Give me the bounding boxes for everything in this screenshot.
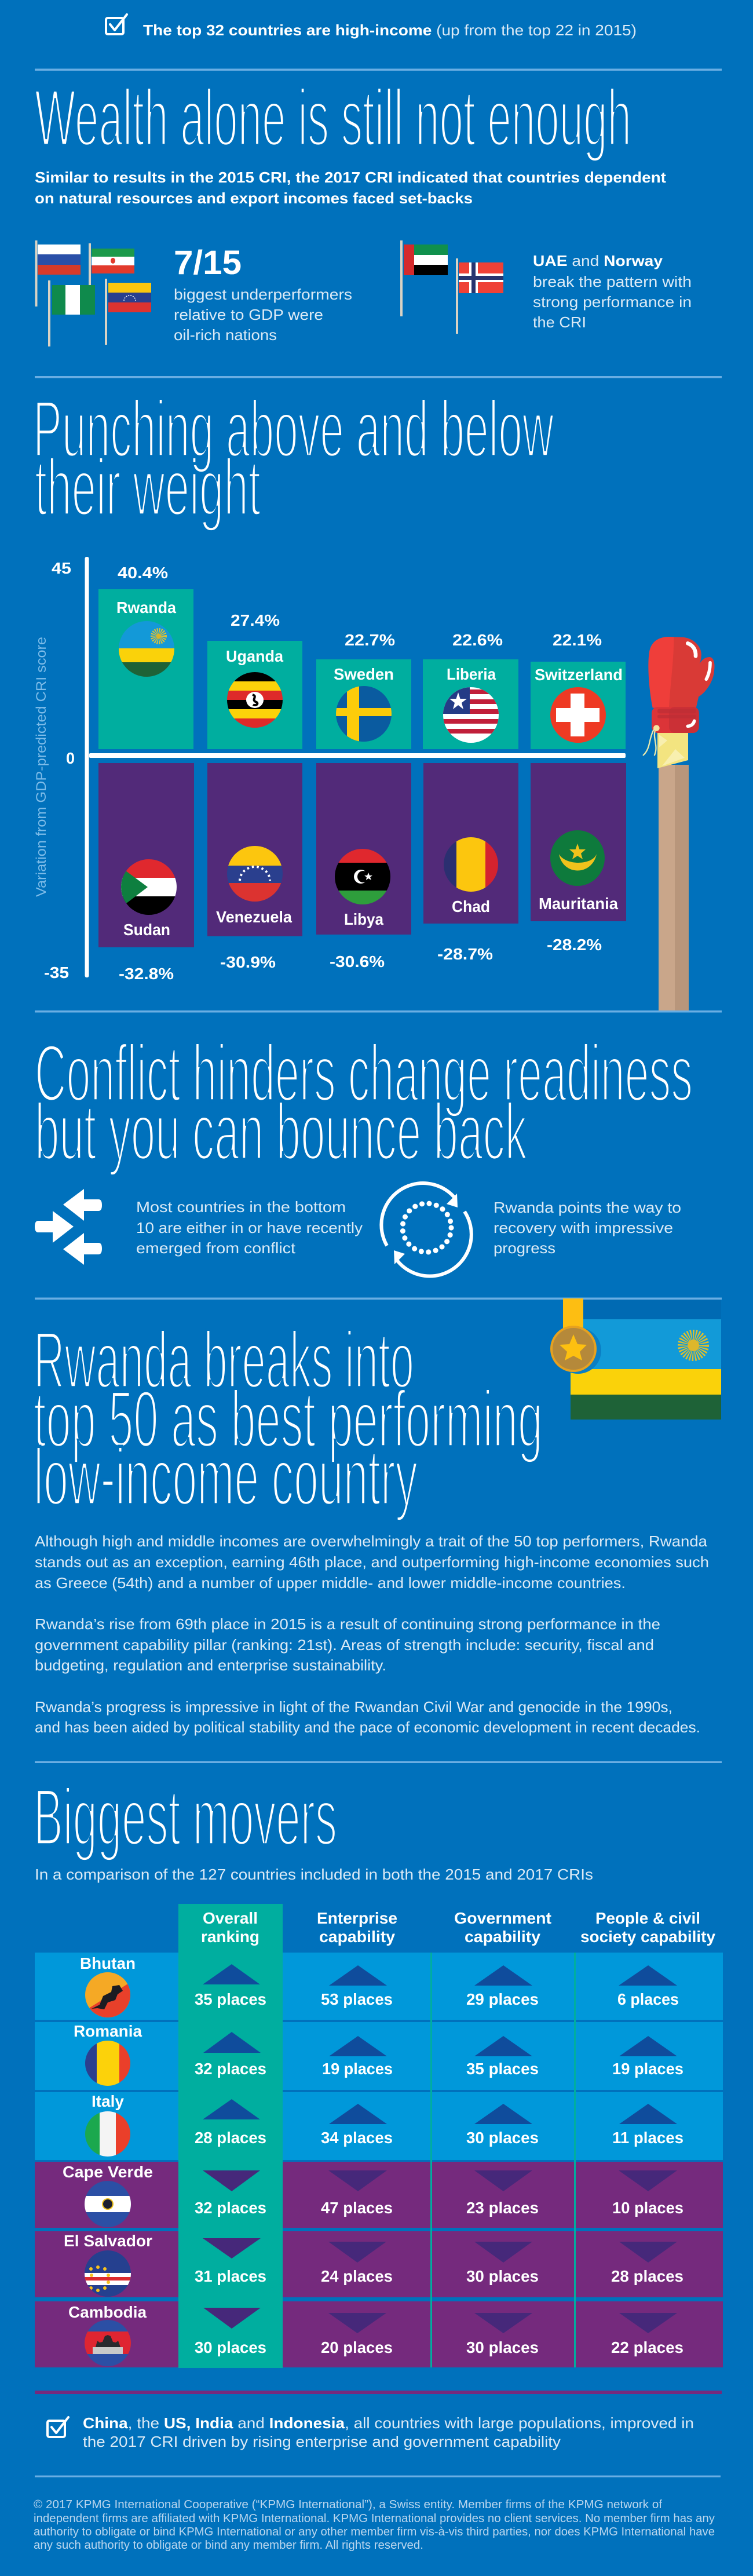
text block: Rwanda paragraphs: Rwanda’s progress is impressive in light of the Rwandan Civil War and genocide in the 1990s, (35, 1698, 672, 1716)
row: El Salvador: 31 places (195, 2267, 266, 2285)
bar: Liberia: 22.6% (452, 631, 503, 649)
text block: wealth intro: on natural resources and export incomes faced set-backs (35, 189, 473, 207)
stat: 7/15: oil-rich nations (174, 326, 277, 344)
text block: Rwanda paragraphs: Although high and middle incomes are overwhelmingly a trait of the 50 top performers, Rwanda (35, 1533, 708, 1550)
heading: Rwanda breaks into top 50 (34, 1315, 543, 1522)
row: Romania: 19 places (612, 2060, 683, 2078)
row: Cambodia: 30 places (466, 2338, 539, 2356)
text block: Rwanda recovery: recovery with impressive (494, 1219, 673, 1236)
row: Italy: 11 places (612, 2129, 683, 2147)
bar: Venezuela (207, 763, 302, 971)
text block: bottom 10 conflict: 10 are either in or have recently (136, 1219, 363, 1236)
text block: bottom 10 conflict: Most countries in the bottom (136, 1198, 346, 1216)
text block: copyright footer: authority to obligate or bind KPMG International or any other member firm vis-à-vis third parties, nor does KPMG International have (34, 2526, 715, 2538)
bar: Uganda (207, 611, 302, 749)
text block: UAE and Norway: UAE and Norway (533, 252, 663, 269)
heading: conflict hinders change readiness (35, 1028, 693, 1177)
heading: Rwanda breaks into top 50: low-income country (34, 1432, 418, 1522)
text block: wealth intro: Similar to results in the 2015 CRI, the 2017 CRI indicated that countries dependent (35, 169, 666, 186)
row: Cape Verde: 32 places (195, 2199, 266, 2217)
row: Cambodia: 30 places (195, 2338, 266, 2356)
bar: Chad: Chad (452, 897, 490, 915)
row: Romania: 35 places (466, 2060, 539, 2078)
heading: punching above and below (33, 384, 554, 532)
icon: Russia flag (35, 240, 81, 307)
row: Cape Verde: Cape Verde (63, 2163, 153, 2181)
column headers: capability (465, 1928, 540, 1946)
bar: Switzerland (531, 631, 626, 749)
bar: Venezuela: -30.9% (220, 953, 276, 971)
text block: comparison note: In a comparison of the 127 countries included in both the 2015 and 2017 CRIs (35, 1866, 593, 1883)
icon: flags of UAE and Norway (400, 240, 503, 334)
row: Romania (74, 2022, 683, 2087)
bar: Switzerland: 22.1% (553, 631, 602, 649)
text block: Rwanda recovery: progress (494, 1239, 555, 1257)
text block: Rwanda paragraphs: government capability pillar (ranking: 21st). Areas of strength include: security, fiscal and (35, 1636, 654, 1654)
bar: Libya: -30.6% (330, 953, 385, 970)
row: El Salvador: 30 places (466, 2267, 539, 2285)
chart axis (34, 557, 626, 981)
icon: Rwanda flag with medal (551, 1298, 721, 1420)
row: Bhutan: 53 places (321, 1990, 393, 2008)
row: Italy: 34 places (321, 2129, 393, 2147)
glove (644, 637, 714, 755)
row: Cambodia: Cambodia (68, 2303, 147, 2321)
text block: UAE and Norway: strong performance in (533, 293, 692, 311)
row: El Salvador: 28 places (611, 2267, 683, 2285)
icon: Iran flag (89, 243, 134, 285)
column headers: ranking (201, 1928, 259, 1946)
row: Bhutan: 6 places (617, 1990, 679, 2008)
bar: Mauritania (531, 763, 626, 954)
icon: opposing arrows (35, 1189, 102, 1265)
bar: Mauritania: Mauritania (539, 895, 618, 913)
row: Cambodia: 22 places (611, 2338, 683, 2356)
row: El Salvador: 24 places (321, 2267, 393, 2285)
text block: copyright footer: any such authority to obligate or bind any member firm. All rights reserved. (34, 2539, 423, 2552)
bar: Sweden: 22.7% (345, 631, 395, 649)
callout: large populations: the 2017 CRI driven by rising enterprise and government capability (83, 2433, 561, 2450)
row: El Salvador: El Salvador (64, 2232, 152, 2250)
chart axis: Variation from GDP-predicted CRI score (34, 637, 49, 897)
text block: bottom 10 conflict: emerged from conflict (136, 1239, 296, 1257)
row: Romania: 19 places (322, 2060, 393, 2078)
text block: UAE and Norway (533, 252, 692, 331)
text block: copyright footer: © 2017 KPMG International Cooperative (“KPMG International”), a Swiss entity. Member firms of the KPMG network of (34, 2498, 662, 2511)
stat: 7/15: relative to GDP were (174, 306, 323, 323)
row: Cape Verde: 47 places (321, 2199, 393, 2217)
column headers: society capability (580, 1928, 715, 1946)
row: Italy: 30 places (466, 2129, 539, 2147)
icon: flags of oil-rich nations (35, 240, 151, 346)
bar: Chad (423, 763, 518, 963)
bar: Sweden: Sweden (334, 665, 394, 683)
bar: Mauritania: -28.2% (547, 936, 602, 954)
stat: 7/15: biggest underperformers (174, 286, 352, 303)
row: Italy: Italy (92, 2092, 124, 2110)
row: Bhutan: 35 places (195, 1990, 266, 2008)
text block: copyright footer: independent firms are affiliated with KPMG International. KPMG International provides no client services. No member firm has any (34, 2512, 715, 2525)
stat: 7/15: 7/15 (174, 244, 242, 282)
row backgrounds (35, 1904, 723, 2368)
callout: large populations (47, 2414, 694, 2450)
column headers: capability (319, 1928, 395, 1946)
bar: Venezuela: Venezuela (216, 908, 292, 926)
text block: Rwanda recovery: Rwanda points the way to (494, 1199, 681, 1216)
text block: Rwanda paragraphs (35, 1533, 709, 1736)
text block: UAE and Norway: break the pattern with (533, 273, 692, 290)
bar: Rwanda (98, 564, 193, 749)
callout: large populations: China, the US, India and Indonesia , all countries with large populations, improved in (83, 2414, 694, 2432)
stat: 7/15 (174, 244, 352, 344)
icon: checkbox (106, 14, 127, 34)
column headers: Enterprise (317, 1909, 397, 1927)
icon: boxing glove on stick (644, 637, 714, 1011)
icon: UAE flag (400, 240, 448, 316)
chart axis: 0 (66, 749, 75, 767)
text block: Rwanda paragraphs: stands out as an exception, earning 46th place, and outperforming high-income economies such (35, 1553, 709, 1571)
icon: Norway flag (456, 258, 503, 334)
bar: Libya (316, 763, 411, 970)
text block: copyright footer (34, 2498, 715, 2552)
row: Italy: 28 places (195, 2129, 266, 2147)
row: Bhutan (80, 1954, 679, 2019)
text block: wealth intro (35, 169, 666, 207)
text block: Rwanda paragraphs: Rwanda’s rise from 69th place in 2015 is a result of continuing strong performance in the (35, 1615, 660, 1633)
bar: Sudan: -32.8% (119, 965, 174, 983)
row: Cape Verde: 10 places (612, 2199, 683, 2217)
row: El Salvador (64, 2232, 683, 2297)
text block: Rwanda paragraphs: budgeting, regulation and enterprise sustainability. (35, 1656, 386, 1674)
bar: Rwanda: 40.4% (118, 564, 168, 582)
icon: checkbox (47, 2417, 68, 2437)
heading: biggest movers: Biggest movers (34, 1772, 337, 1862)
row: Cape Verde (63, 2163, 683, 2227)
callout: top 32 countries: The top 32 countries are high-income (up from the top 22 in 2015) (143, 21, 637, 39)
row: Romania: Romania (74, 2022, 142, 2040)
column headers: Overall (203, 1909, 258, 1927)
bar: Libya: Libya (344, 910, 383, 928)
bar: Liberia: Liberia (447, 665, 496, 683)
stick (657, 732, 689, 1011)
row: Cambodia (68, 2303, 683, 2366)
text block: Rwanda recovery (494, 1199, 681, 1257)
icon: Venezuela flag (105, 279, 151, 345)
bar: Sweden (316, 631, 411, 749)
text block: Rwanda paragraphs: as Greece (54th) and a number of upper middle- and lower middle-income countries. (35, 1574, 626, 1592)
column headers: People & civil (595, 1909, 700, 1927)
callout: top 32 countries (106, 14, 637, 39)
column headers: Government (454, 1909, 551, 1927)
heading: punching above and below: their weight (35, 443, 261, 532)
row: Bhutan: Bhutan (80, 1954, 136, 1972)
chart axis: 45 (52, 559, 71, 577)
bar: Switzerland: Switzerland (535, 666, 623, 684)
bar: Rwanda: Rwanda (116, 599, 176, 616)
bar: Uganda: Uganda (226, 647, 283, 665)
row: Cambodia: 20 places (321, 2338, 393, 2356)
row: Cape Verde: 23 places (466, 2199, 539, 2217)
chart axis: -35 (44, 964, 69, 981)
text block: UAE and Norway: the CRI (533, 313, 586, 331)
bar chart: variation from GDP-predicted CRI score (34, 557, 714, 1011)
bar: Chad: -28.7% (437, 945, 493, 963)
row: Italy (85, 2092, 683, 2158)
row: Bhutan: 29 places (466, 1990, 539, 2008)
bar: Liberia (423, 631, 518, 749)
row: Romania: 32 places (195, 2060, 266, 2078)
icon: Nigeria flag (48, 280, 95, 346)
bar: Sudan: Sudan (123, 921, 170, 939)
bar: Uganda: 27.4% (231, 611, 280, 629)
heading: Rwanda breaks into top 50: Rwanda breaks into (34, 1315, 414, 1405)
column headers (201, 1909, 715, 1946)
icon: recovery cycle (381, 1183, 471, 1276)
table: biggest movers (35, 1904, 723, 2368)
bar: Sudan (98, 763, 194, 983)
text block: bottom 10 conflict (136, 1198, 363, 1257)
text block: Rwanda paragraphs: and has been aided by political stability and the pace of economic development in recent decades. (35, 1718, 700, 1736)
